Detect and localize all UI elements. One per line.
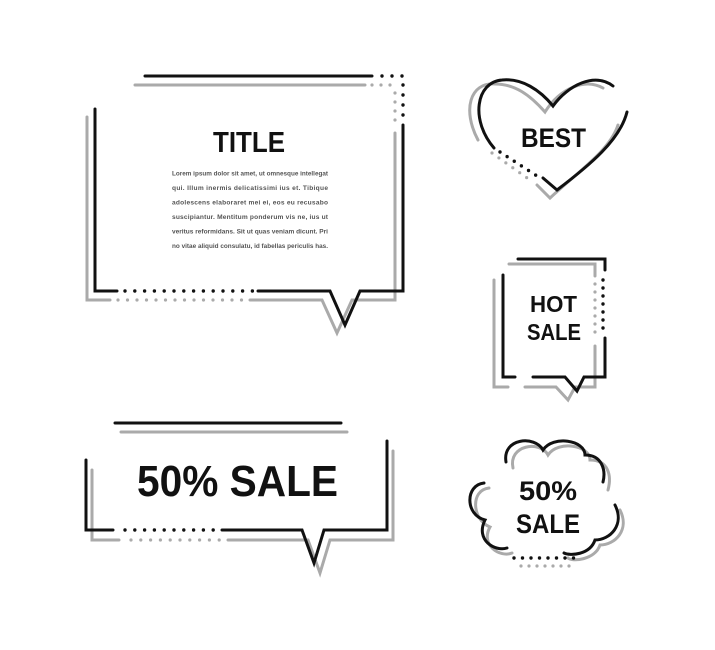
panel: HOT SALE square bubble <box>494 259 605 400</box>
heading: 50% SALE cloud: SALE <box>516 509 580 539</box>
heading: HOT SALE: HOT <box>530 291 577 317</box>
text block: lorem ipsum <box>172 170 329 250</box>
heading: BEST: BEST <box>521 123 586 153</box>
heading: TITLE: TITLE <box>213 127 285 159</box>
text block: lorem ipsum: Lorem ipsum dolor sit amet, ut omnesque intellegat <box>172 170 329 178</box>
text block: lorem ipsum: veritus reformidans. Sit ut quas veniam dicunt. Pri <box>172 228 328 236</box>
text block: lorem ipsum: adolescens elaboraret mei ei, eos eu recusabo <box>172 200 328 206</box>
heading: 50% SALE cloud <box>516 476 580 539</box>
heading: 50% SALE: 50% SALE <box>137 457 338 506</box>
panel: title speech bubble <box>87 76 403 333</box>
heading: 50% SALE cloud: 50% <box>519 476 577 506</box>
heading: HOT SALE: SALE <box>527 319 581 345</box>
heading: HOT SALE <box>527 291 581 345</box>
panel: 50% SALE cloud <box>470 441 623 566</box>
text block: lorem ipsum: qui. Illum inermis delicatissimi ius et. Tibique <box>172 185 328 192</box>
panel: BEST heart <box>470 80 627 198</box>
text block: lorem ipsum: no vitae aliquid consulatu, id fabellas periculis has. <box>172 243 328 250</box>
panel: 50% SALE banner bubble <box>86 423 393 573</box>
text block: lorem ipsum: suscipiantur. Mentitum ponderum vis ne, ius ut <box>172 214 329 221</box>
